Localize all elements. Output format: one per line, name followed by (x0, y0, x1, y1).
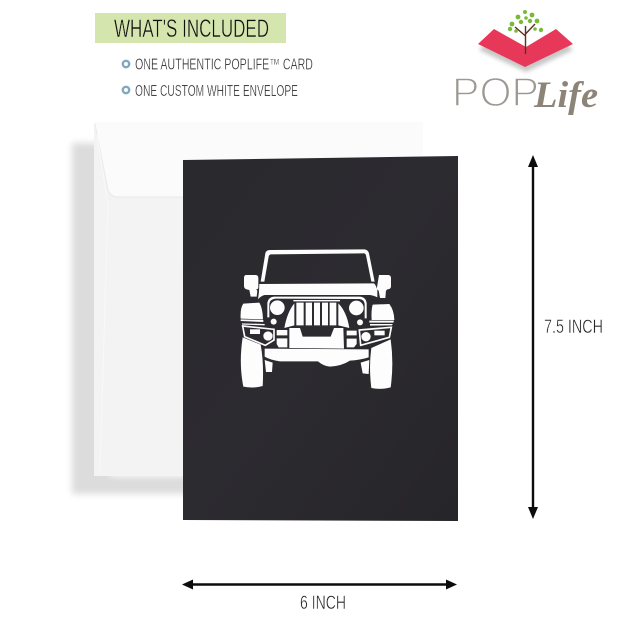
jeep illustration (241, 249, 394, 389)
list item: poplife card (123, 56, 313, 74)
heading: what's included (95, 13, 286, 43)
list item: white envelope (123, 83, 298, 100)
right tire (370, 339, 392, 389)
width label: 6 INCH (300, 593, 346, 614)
heading: what's included: WHAT'S INCLUDED (114, 15, 269, 43)
left mirror (244, 275, 258, 297)
width dimension arrow (182, 580, 457, 590)
height dimension arrow (528, 155, 538, 519)
logo: poplife (452, 10, 598, 116)
left fender (241, 303, 263, 319)
left tire (241, 337, 263, 388)
headlights (270, 300, 285, 315)
jeep bumper (289, 328, 344, 349)
axle and skid plate (265, 349, 369, 367)
logo icon: tree (508, 10, 543, 54)
envelope flap (94, 122, 423, 197)
jeep hood (258, 283, 377, 299)
list item: white envelope: ONE CUSTOM WHITE ENVELOPE (135, 83, 298, 100)
grille frame (267, 297, 367, 318)
logo wordmark: POP (452, 69, 539, 115)
logo: poplife: Life (533, 75, 598, 116)
right fog lamp housing (359, 327, 391, 345)
list item: poplife card: ONE AUTHENTIC POPLIFE™ CARD (135, 56, 313, 74)
envelope shadow (72, 143, 200, 494)
right mirror (377, 275, 391, 298)
black card (183, 156, 458, 521)
left fog lamp housing (243, 326, 274, 345)
right fender (371, 304, 394, 320)
envelope (94, 122, 423, 476)
height label: 7.5 INCH (544, 317, 603, 338)
logo icon: red open book (479, 33, 573, 72)
jeep roof and windshield frame (261, 249, 375, 282)
grille slots (296, 303, 336, 325)
